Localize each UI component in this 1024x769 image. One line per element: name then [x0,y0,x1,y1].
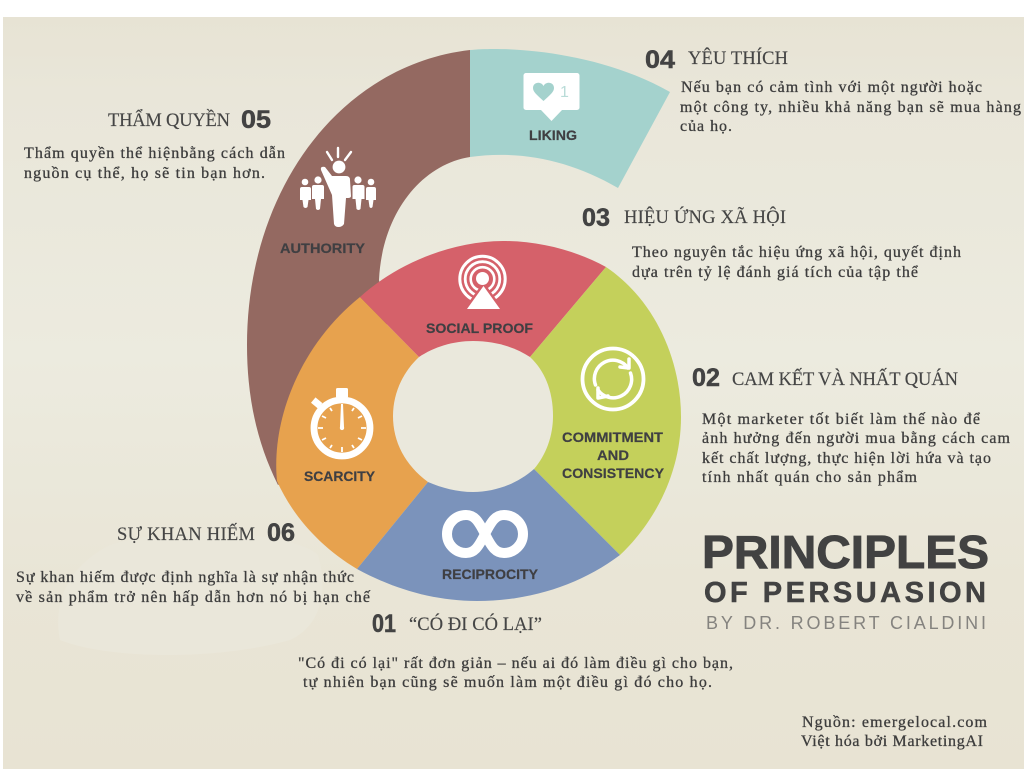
title: BY DR. ROBERT CIALDINI [706,613,986,633]
text block: 02 commitment: Một marketer tốt biết làm thế nào để [702,411,981,428]
label: commitment and consistency: CONSISTENCY [562,465,665,481]
text block: 04 liking [645,46,1021,135]
text block: 02 commitment: 02 [692,364,720,392]
label: social proof: SOCIAL PROOF [426,320,533,336]
text block: 05 authority: 05 [241,106,271,134]
panel: scarcity segment [276,297,428,569]
text block: 05 authority: Thẩm quyền thể hiệnbằng cách dẫn [24,145,285,162]
text block: 03 social proof: HIỆU ỨNG XÃ HỘI [624,206,786,228]
text block: 02 commitment: CAM KẾT VÀ NHẤT QUÁN [732,368,958,390]
icon: refresh circle [582,348,644,410]
text block: 02 commitment: kết chất lượng, thực hiện lời hứa và tạo [702,450,991,467]
text block: 06 scarcity [16,519,371,606]
text block: 02 commitment: ảnh hưởng đến người mua bằng cách cam [702,430,1011,447]
title: OF PERSUASION [704,577,986,609]
center hole [393,341,553,492]
text block: 02 commitment [692,364,1011,486]
text block: 05 authority [24,106,285,182]
icon: like bubble [524,73,580,121]
source credits: Việt hóa bởi MarketingAI [801,733,983,750]
panel: reciprocity segment [357,450,620,601]
text block: 05 authority: THẨM QUYỀN [108,109,230,131]
source credits [801,714,988,750]
panel: commitment segment [500,267,681,555]
text block: 06 scarcity: SỰ KHAN HIẾM [117,523,255,545]
text block: 01 reciprocity [298,610,733,691]
label: authority: AUTHORITY [280,240,366,256]
text block: 03 social proof: Theo nguyên tắc hiệu ứng xã hội, quyết định [632,244,961,261]
panel: authority arc [247,50,470,485]
label: commitment and consistency: COMMITMENT [562,429,663,445]
icon: stopwatch [311,388,370,456]
text block: 04 liking: YÊU THÍCH [688,47,788,69]
label: reciprocity: RECIPROCITY [442,566,539,582]
label: liking: LIKING [529,127,577,143]
text block: 01 reciprocity: "Có đi có lại" rất đơn giản – nếu ai đó làm điều gì cho bạn, [298,655,733,672]
text block: 01 reciprocity: “CÓ ĐI CÓ LẠI” [409,613,542,635]
text block: 03 social proof: 03 [582,204,610,232]
title [702,526,989,633]
text block: 04 liking: một công ty, nhiều khả năng bạn sẽ mua hàng [680,99,1021,116]
text block: 02 commitment: tính nhất quán cho sản phẩm [702,469,918,486]
icon: broadcast signal [460,256,507,314]
icon: like bubble: 1 [560,84,569,101]
text block: 04 liking: Nếu bạn có cảm tình với một người hoặc [681,79,982,96]
icon: authority figures [300,148,376,227]
source credits: Nguồn: emergelocal.com [802,714,988,731]
icon: infinity loop [447,515,523,553]
label: commitment and consistency [562,429,665,481]
text block: 01 reciprocity: 01 [372,610,396,638]
text block: 03 social proof: dựa trên tỷ lệ đánh giá tích của tập thể [632,264,919,281]
text block: 01 reciprocity: tự nhiên bạn cũng sẽ muốn làm một điều gì đó cho họ. [303,674,712,691]
text block: 06 scarcity: Sự khan hiếm được định nghĩa là sự nhận thức [16,569,354,586]
label: scarcity: SCARCITY [304,468,376,484]
text block: 06 scarcity: về sản phẩm trở nên hấp dẫn hơn nó bị hạn chế [16,589,371,606]
text block: 04 liking: của họ. [680,118,732,135]
title: PRINCIPLES [702,526,989,578]
text block: 06 scarcity: 06 [267,519,295,547]
text block: 03 social proof [582,204,961,281]
panel: liking arc [470,49,670,188]
text block: 04 liking: 04 [645,46,675,74]
text block: 05 authority: nguồn cụ thể, họ sẽ tin bạn hơn. [24,165,265,182]
panel: social proof segment [360,241,606,400]
label: commitment and consistency: AND [597,447,629,463]
